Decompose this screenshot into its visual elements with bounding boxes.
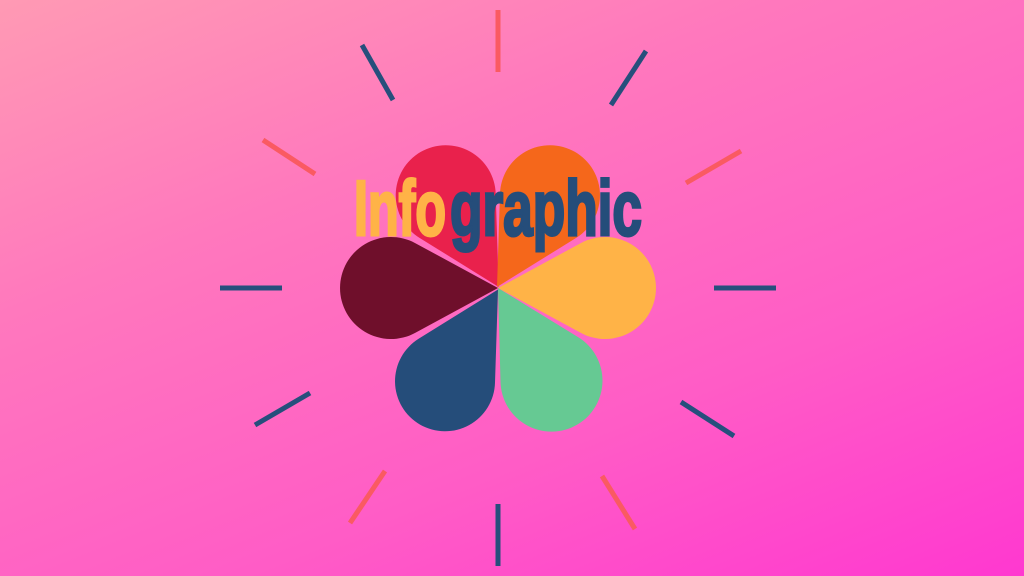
petal: orange bbox=[454, 127, 618, 312]
petal: green bbox=[454, 262, 621, 450]
title part: graphic: graphic bbox=[450, 164, 642, 252]
radiating tick marks bbox=[220, 10, 776, 566]
petal: navy bbox=[377, 264, 541, 450]
title: Infographic bbox=[354, 164, 642, 252]
petal: red bbox=[377, 127, 542, 312]
petal: yellow bbox=[498, 237, 656, 339]
flower of six petals bbox=[340, 127, 656, 450]
title part: Info: Info bbox=[354, 164, 446, 252]
petal: maroon bbox=[340, 237, 498, 339]
